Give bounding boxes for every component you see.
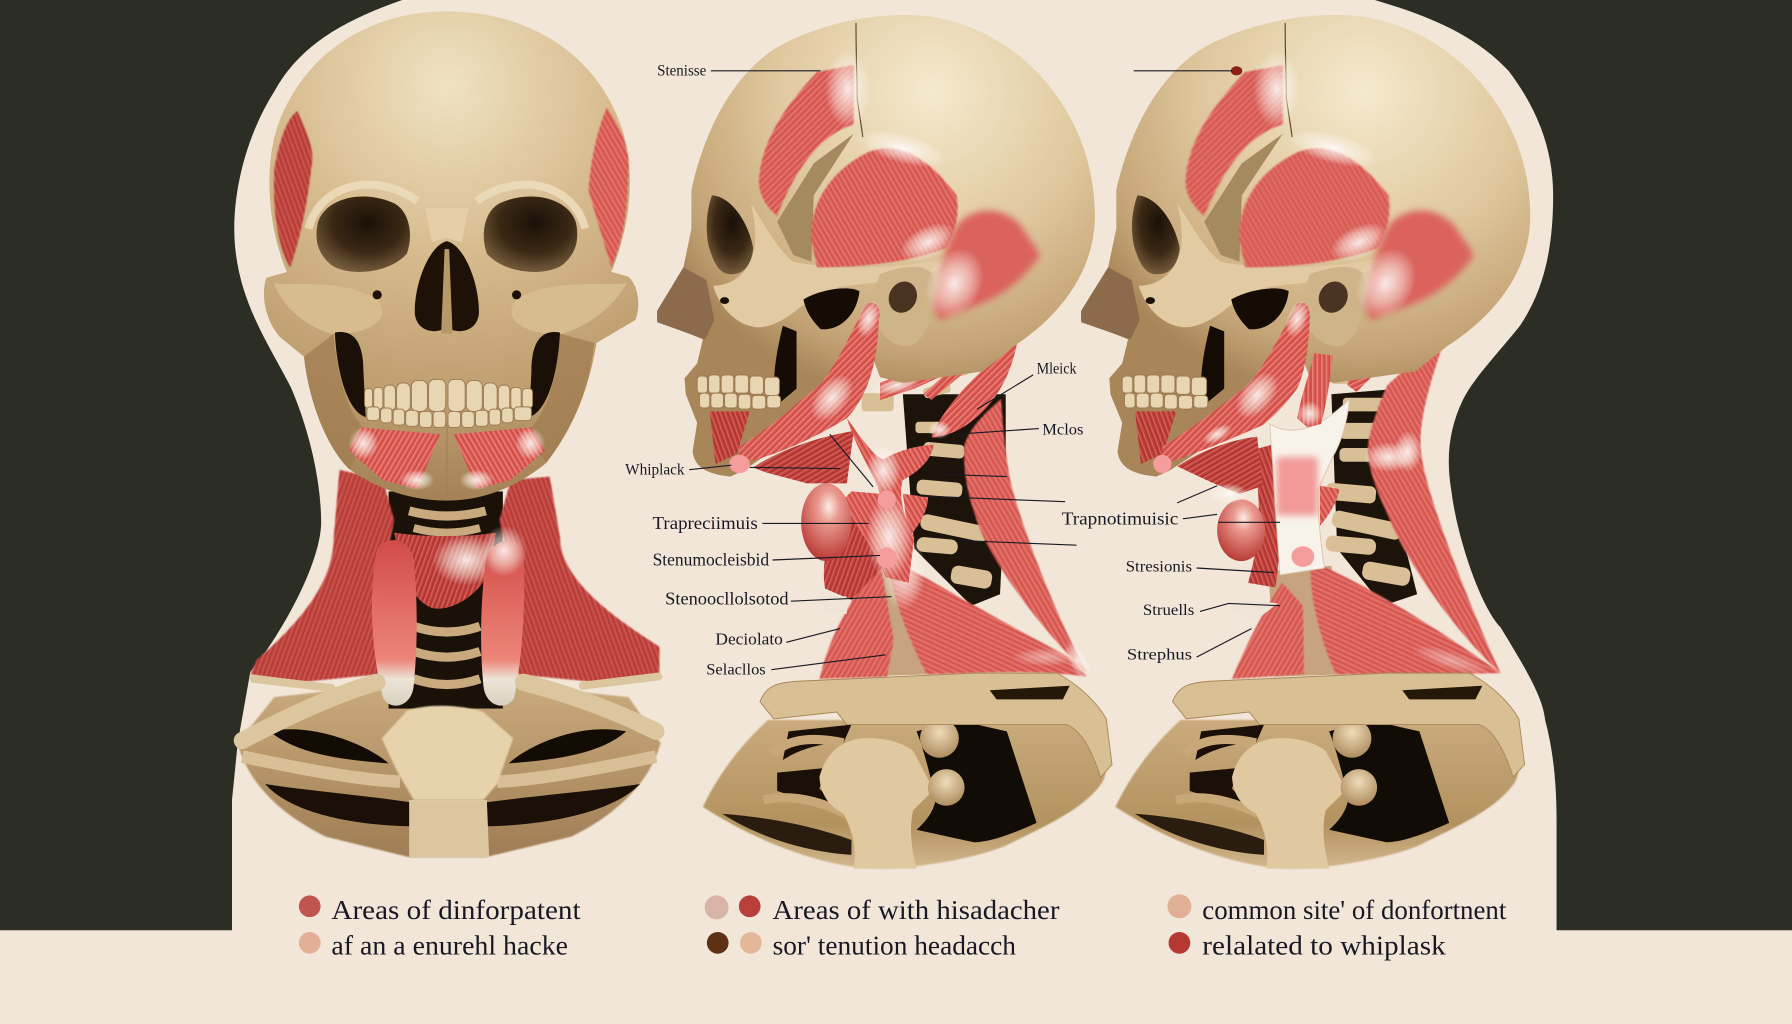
legend: right: relalated to whiplask bbox=[1202, 930, 1446, 960]
central tendon with red heads bbox=[840, 418, 934, 583]
labels: Mleick bbox=[1037, 361, 1077, 378]
legend: left: Areas of dinforpatent bbox=[331, 895, 581, 925]
labels: Stenisse bbox=[657, 62, 706, 79]
dark marker bbox=[1231, 66, 1242, 75]
sternum bbox=[382, 706, 513, 800]
temple recess bbox=[777, 134, 854, 262]
central neck band bbox=[394, 533, 501, 609]
central tendon bbox=[1270, 399, 1350, 575]
neck base behind tendons bbox=[851, 566, 931, 677]
labels: Deciolato bbox=[715, 630, 783, 649]
sternocleidomastoid left bbox=[372, 540, 417, 706]
white strip bbox=[822, 594, 847, 614]
label lines bbox=[1134, 71, 1280, 657]
upper neck muscle bbox=[928, 343, 1017, 439]
nose bbox=[657, 267, 714, 339]
left dark panel bbox=[0, 0, 402, 930]
teeth side bbox=[697, 375, 781, 409]
figure: side view with tension headache areas bbox=[625, 15, 1112, 869]
labels: Trapnotimuisic bbox=[1062, 509, 1178, 529]
teeth bbox=[365, 379, 533, 427]
left jaw shading bbox=[304, 334, 368, 470]
ear bbox=[871, 267, 934, 346]
labels: Strephus bbox=[1127, 646, 1192, 663]
thin upper muscle bbox=[871, 338, 1008, 400]
torso copy bbox=[1115, 719, 1519, 869]
neck muscles right bbox=[499, 477, 659, 682]
labels: Whiplack bbox=[625, 461, 685, 478]
neck upper strap bbox=[1297, 353, 1333, 427]
lower front strap muscles bbox=[819, 561, 894, 679]
clavicle copy bbox=[1173, 673, 1525, 777]
suture bbox=[856, 23, 863, 137]
skull side bbox=[657, 15, 1095, 477]
labels: Stenoocllolsotod bbox=[665, 589, 789, 609]
eye socket left bbox=[316, 197, 410, 272]
lower front strap muscles bbox=[1232, 583, 1304, 679]
clavicle and scapula bbox=[760, 673, 1112, 777]
labels: Stresionis bbox=[1126, 558, 1192, 575]
neck back shadow bbox=[389, 491, 503, 709]
tracheal rings bbox=[409, 511, 486, 685]
thyroid bulge bbox=[801, 483, 851, 561]
label lines bbox=[689, 71, 1077, 670]
cranium and face bbox=[657, 15, 1095, 477]
temporal muscle right bbox=[589, 107, 629, 267]
labels: Selacllos bbox=[706, 661, 766, 678]
cheek bone left bbox=[274, 283, 382, 334]
skull side copy bbox=[1081, 15, 1530, 477]
large temporal muscle bbox=[811, 122, 962, 269]
labels bbox=[625, 62, 1083, 678]
white strip bbox=[1229, 600, 1278, 619]
mouth cavity right bbox=[529, 332, 560, 417]
legend: middle bbox=[705, 895, 1059, 960]
spine gap bbox=[903, 394, 1006, 606]
nasal bone bbox=[425, 208, 469, 242]
digastric strap muscle bbox=[739, 297, 885, 464]
occipital muscle bbox=[914, 210, 1040, 328]
small neck muscle bbox=[923, 366, 966, 400]
neck muscles left bbox=[250, 470, 394, 682]
figure: side view with whiplash sites bbox=[1062, 15, 1530, 869]
chin muscle left bbox=[349, 427, 440, 490]
legend: middle: Areas of with hisadacher bbox=[773, 895, 1059, 925]
eye socket right bbox=[484, 197, 577, 272]
posterior neck muscle bbox=[964, 399, 1096, 683]
torso with ribs and shoulder bbox=[703, 719, 1106, 869]
pink markers bbox=[729, 455, 897, 568]
eye socket bbox=[707, 195, 753, 274]
pink markers bbox=[1153, 455, 1314, 567]
legend: right: common site' of donfortnent bbox=[1202, 895, 1507, 925]
spine gap bbox=[1331, 389, 1417, 606]
foramina bbox=[373, 290, 521, 299]
vertebrae bbox=[862, 363, 993, 590]
submandibular muscle bbox=[1177, 437, 1263, 504]
skull front bbox=[264, 11, 638, 501]
brow ridge bbox=[309, 185, 585, 229]
chest and ribs bbox=[238, 686, 661, 857]
cheek and arch bbox=[713, 203, 944, 327]
labels: Struells bbox=[1143, 602, 1194, 619]
submandibular muscle bbox=[753, 431, 854, 483]
left collar bones bbox=[242, 679, 377, 741]
upper openings bbox=[774, 288, 859, 407]
right collar bones bbox=[523, 677, 658, 731]
sternocleidomastoid right bbox=[481, 526, 527, 706]
upper temporal muscle bbox=[759, 50, 871, 216]
legend: left: af an a enurehl hacke bbox=[331, 930, 568, 960]
legend: left bbox=[299, 895, 581, 960]
front neck muscle bbox=[824, 503, 889, 600]
nose cavity bbox=[415, 241, 479, 334]
labels: Trapreciimuis bbox=[653, 513, 758, 533]
posterior neck muscle bbox=[1363, 346, 1501, 673]
upper neck muscle bbox=[1347, 333, 1439, 392]
cheek bone right bbox=[511, 283, 626, 334]
labels: Stenumocleisbid bbox=[653, 550, 769, 570]
legend: middle: sor' tenution headacch bbox=[773, 930, 1016, 960]
right dark panel bbox=[1375, 0, 1792, 930]
nasal foramen bbox=[720, 297, 729, 304]
legend: right bbox=[1167, 894, 1507, 960]
front vertical strap muscle bbox=[1248, 443, 1281, 587]
mandible muscle bbox=[710, 411, 750, 464]
facial midline bbox=[446, 423, 448, 498]
labels: Mclos bbox=[1042, 421, 1083, 438]
vertebrae bbox=[1325, 371, 1412, 587]
fan muscle bbox=[880, 533, 1087, 677]
temporal muscle left bbox=[274, 111, 312, 267]
figure: front view of skull and neck bbox=[238, 11, 661, 857]
chin muscle right bbox=[454, 427, 545, 490]
fan muscle bbox=[1311, 561, 1501, 682]
thyroid bulge bbox=[1217, 499, 1265, 561]
right jaw shading bbox=[526, 334, 594, 463]
neck base behind tendons bbox=[1269, 566, 1343, 677]
labels bbox=[1062, 509, 1194, 663]
mouth cavity left bbox=[335, 332, 366, 417]
digastric strap muscle bbox=[1162, 297, 1313, 464]
